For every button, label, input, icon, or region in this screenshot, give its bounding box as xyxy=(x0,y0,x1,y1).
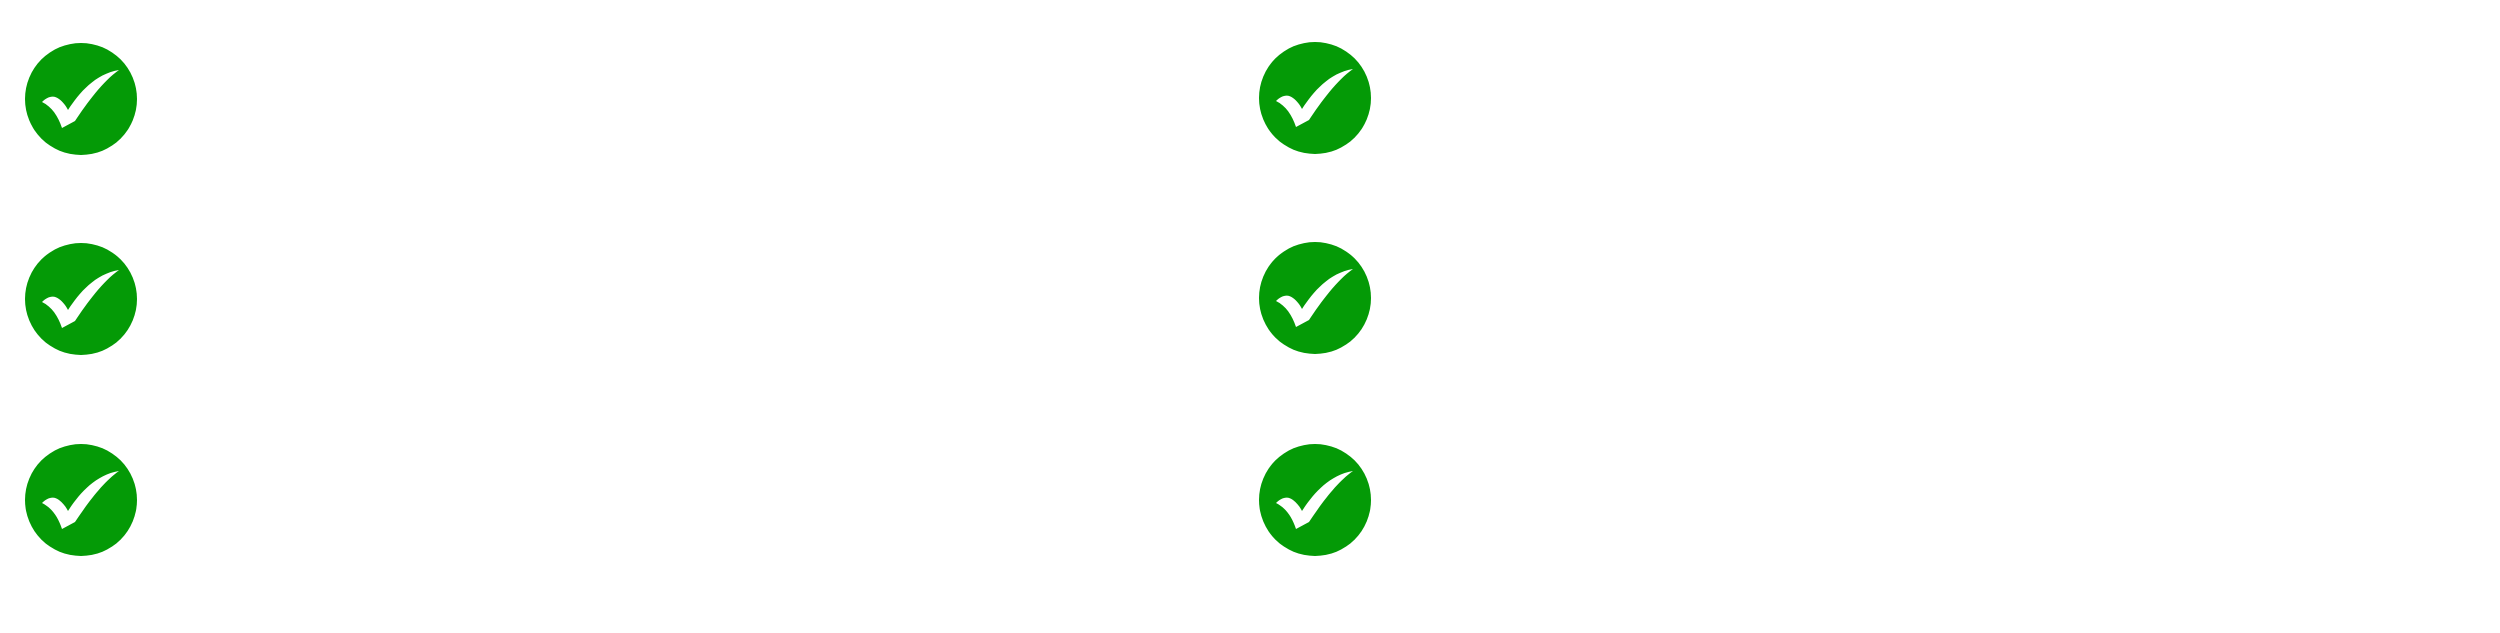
icon: check 4 xyxy=(1259,42,1371,154)
icon: check 5 xyxy=(1259,242,1371,354)
icon: check 3 xyxy=(25,444,137,556)
icon: check 6 xyxy=(1259,444,1371,556)
icon: check 1 xyxy=(25,43,137,155)
icon: check 2 xyxy=(25,243,137,355)
